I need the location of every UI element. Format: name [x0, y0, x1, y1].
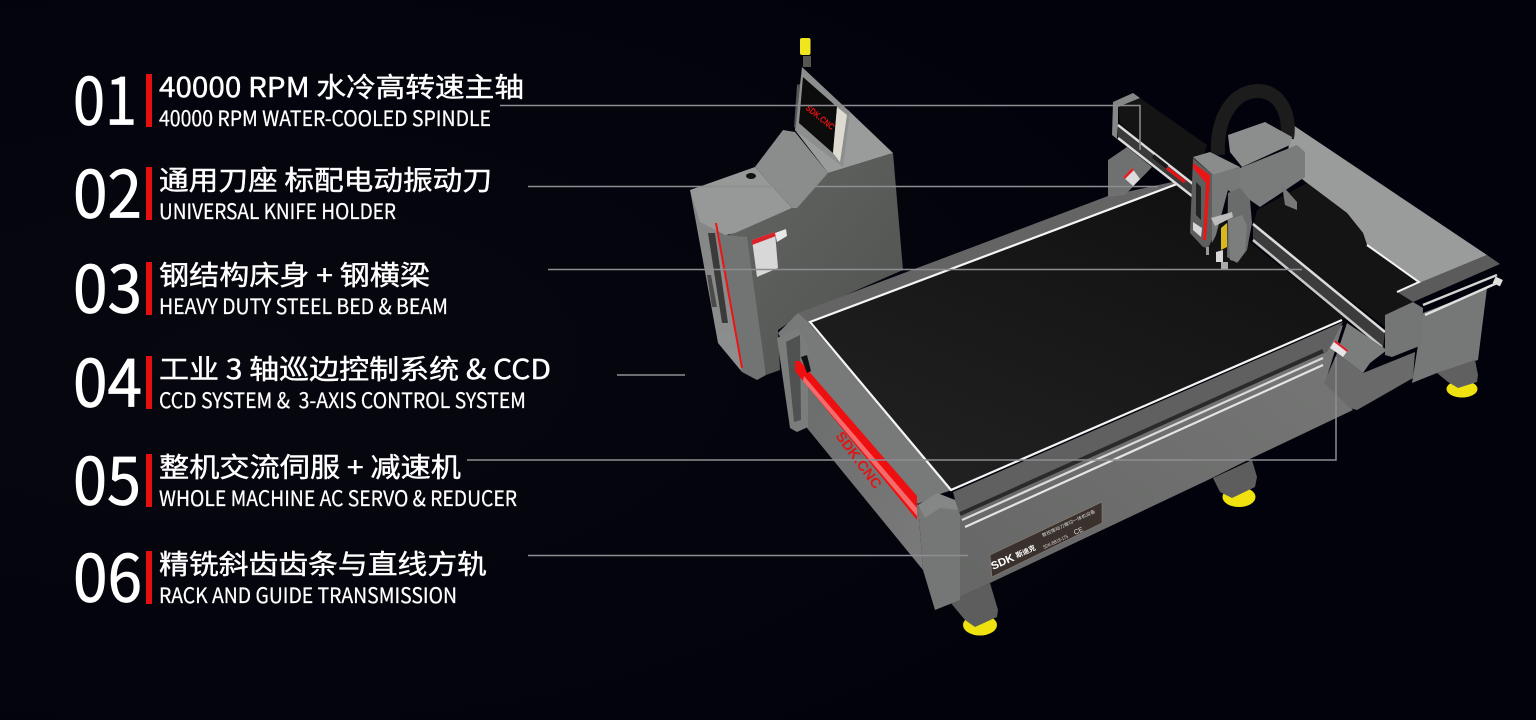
top box [1228, 122, 1292, 167]
number 03: 03 [73, 238, 142, 332]
nameplate: SDK [989, 552, 1016, 573]
monitor side [794, 84, 800, 128]
corner leg [950, 583, 998, 636]
beam red label [1167, 168, 1185, 182]
left rail band [1118, 124, 1193, 196]
red bar 03 [146, 262, 152, 315]
cutting head [1190, 91, 1305, 270]
leader 01 [500, 106, 1140, 150]
feature 03 [73, 238, 448, 332]
cabinet right face [728, 153, 903, 375]
cabinet vent decal [708, 233, 728, 323]
heading 02: 通用刀座 标配电动振动刀 [159, 159, 492, 198]
heading 06: 精铣斜齿齿条与直线方轨 [159, 543, 487, 582]
red bar 02 [146, 167, 152, 220]
monitor screen [799, 77, 837, 153]
cabinet left face [690, 190, 742, 372]
bracket sticker [1330, 340, 1348, 357]
red light strip [795, 361, 917, 520]
left post recess [786, 335, 801, 422]
touch screen and beacon [794, 38, 850, 167]
heading 04: 工业 3 轴巡边控制系统 & CCD [159, 348, 551, 387]
rear table black [1253, 183, 1418, 327]
number 02: 02 [73, 142, 142, 236]
left gantry end [1112, 93, 1140, 139]
small badge [801, 355, 811, 373]
tool column [1227, 188, 1252, 263]
gantry beam [1108, 93, 1423, 410]
number 01: 01 [73, 50, 137, 144]
right gantry rails [1253, 224, 1385, 347]
subheading 03: HEAVY DUTY STEEL BED & BEAM [159, 291, 448, 321]
subheading 01: 40000 RPM WATER-COOLED SPINDLE [159, 103, 491, 133]
beam black back [1118, 98, 1207, 190]
head warning sticker [1193, 222, 1202, 237]
nameplate: CE [1073, 526, 1085, 537]
cabinet red stripe [715, 223, 743, 368]
leader lines [467, 106, 1336, 556]
machine body [777, 125, 1503, 636]
rear right top panel [1285, 125, 1487, 283]
nameplate [989, 502, 1102, 577]
cable arch [1218, 91, 1288, 155]
subheading 02: UNIVERSAL KNIFE HOLDER [159, 196, 396, 226]
subheading 04: CCD SYSTEM & 3-AXIS CONTROL SYSTEM [159, 385, 526, 415]
screen logo: SDK.CNC [804, 103, 837, 132]
number 04: 04 [73, 332, 142, 426]
spindle yellow [1221, 223, 1227, 250]
plate red panel [1193, 163, 1210, 240]
left corner post [777, 328, 808, 432]
heading 03: 钢结构床身 + 钢横梁 [159, 254, 430, 293]
front linear rail [960, 351, 1323, 527]
monitor frame [795, 67, 850, 167]
leader 06 [528, 554, 968, 556]
tool second box [1228, 215, 1247, 262]
table surface [810, 184, 1345, 490]
feature 01 [73, 50, 524, 144]
number 06: 06 [73, 526, 142, 620]
nameplate: SDK-BB18-175 [1042, 534, 1069, 551]
leader 03 [548, 268, 1302, 270]
cabinet slope panel [755, 130, 828, 208]
right rail band [1253, 222, 1385, 349]
table white edges [810, 184, 1342, 490]
left support sticker [1123, 168, 1140, 186]
leader 05 [467, 357, 1336, 460]
lower bracket top [1337, 323, 1387, 373]
nameplate: 斯迪克 [1014, 543, 1037, 561]
front body panel [950, 325, 1353, 602]
red bar 06 [146, 551, 152, 604]
cabinet top back [795, 110, 893, 173]
front rim [953, 322, 1343, 512]
plate dark label [1196, 182, 1201, 220]
blade [1221, 262, 1228, 270]
cabinet warning sticker [752, 229, 787, 277]
leader 02 [528, 186, 1158, 188]
beacon light [800, 38, 810, 55]
red bar 05 [146, 454, 152, 507]
beacon stem [803, 56, 811, 67]
side logo: SDK.CNC [833, 428, 885, 492]
tool sticker [1216, 250, 1223, 262]
plate right face [1212, 167, 1240, 243]
cabinet top front [690, 167, 792, 235]
leader 04 [617, 374, 685, 376]
heading 01: 40000 RPM 水冷高转速主轴 [159, 66, 524, 105]
control cabinet [690, 110, 903, 380]
corner post highlight [918, 493, 958, 518]
left table rim [778, 313, 952, 504]
rear rails [1423, 275, 1503, 315]
cabinet grille [707, 275, 717, 307]
red bar 01 [146, 74, 152, 127]
feature 06 [73, 526, 487, 620]
feature 04 [73, 332, 551, 426]
bracket tab [1282, 185, 1297, 210]
cabinet corner strip [715, 222, 766, 380]
plate top [1193, 152, 1240, 175]
heading 05: 整机交流伺服 + 减速机 [159, 446, 461, 485]
monitor keypad panel [833, 107, 847, 162]
rear leg [1437, 360, 1478, 398]
number 05: 05 [73, 430, 141, 524]
side rail grey strip [798, 181, 1177, 330]
middle leg [1213, 460, 1257, 507]
subheading 05: WHOLE MACHINE AC SERVO & REDUCER [159, 483, 517, 513]
front corner post [918, 493, 960, 610]
small knife [1206, 247, 1209, 255]
nameplate: 数控振动刀裁切一体机设备 [1041, 508, 1097, 539]
right gantry end [1385, 302, 1423, 357]
feature 02 [73, 142, 492, 236]
beam dark label [1153, 156, 1167, 167]
plate left face [1190, 158, 1213, 248]
tool clamp [1211, 212, 1233, 226]
rear table white edge [1367, 245, 1419, 292]
subheading 06: RACK AND GUIDE TRANSMISSION [159, 580, 457, 610]
feature 05 [73, 430, 517, 524]
red bar 04 [146, 356, 152, 409]
left gantry support [1108, 147, 1152, 197]
lower bracket front [1324, 352, 1415, 410]
left gantry rails [1118, 125, 1193, 196]
carriage box [1240, 145, 1305, 207]
cable hole [746, 173, 756, 179]
left side panel [800, 350, 923, 570]
rear right body side [1412, 288, 1487, 383]
rear ledge [1397, 255, 1500, 302]
